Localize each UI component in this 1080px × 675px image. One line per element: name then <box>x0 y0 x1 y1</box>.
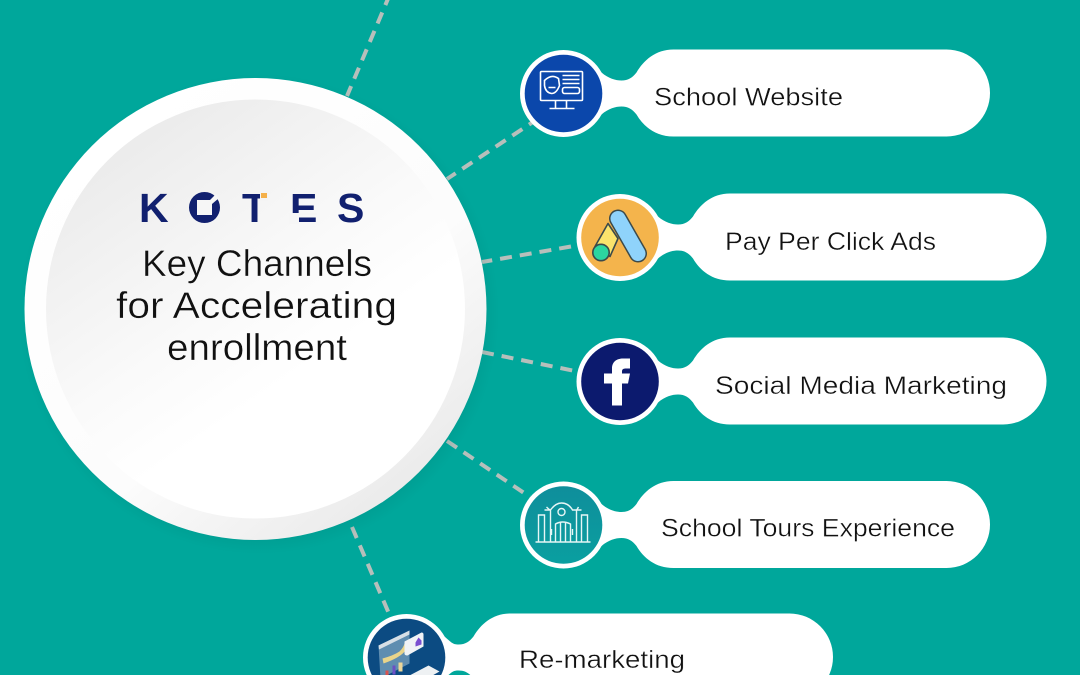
channel: Social Media Marketing <box>576 338 1046 425</box>
logo: KOTES: S <box>337 185 364 231</box>
channel: Re-marketing <box>363 614 833 675</box>
label: School Tours Experience <box>661 514 955 542</box>
title <box>116 243 397 368</box>
icon: facebook f <box>604 358 630 406</box>
label: School Website <box>654 84 843 112</box>
icon: ads logo <box>593 218 638 261</box>
channel: Pay Per Click Ads <box>576 194 1046 281</box>
logo: KOTES: K <box>139 185 169 231</box>
title: for Accelerating <box>116 285 397 326</box>
label: Re-marketing <box>519 646 685 674</box>
logo: KOTES <box>139 185 364 231</box>
title: Key Channels <box>142 243 372 284</box>
logo: KOTES: O <box>189 185 221 231</box>
channel: School Tours Experience <box>520 481 990 568</box>
icon: website monitor <box>540 72 582 108</box>
label: Pay Per Click Ads <box>725 228 936 256</box>
icon: school building <box>536 503 590 542</box>
panel: central circle <box>19 74 499 554</box>
label: Social Media Marketing <box>715 372 1007 400</box>
logo: KOTES: T <box>242 185 267 231</box>
dashed connectors <box>347 0 575 616</box>
logo: KOTES: E <box>290 185 317 231</box>
title: enrollment <box>167 327 348 368</box>
channel: School Website <box>520 50 990 137</box>
icon: analytics dashboard <box>378 630 440 675</box>
